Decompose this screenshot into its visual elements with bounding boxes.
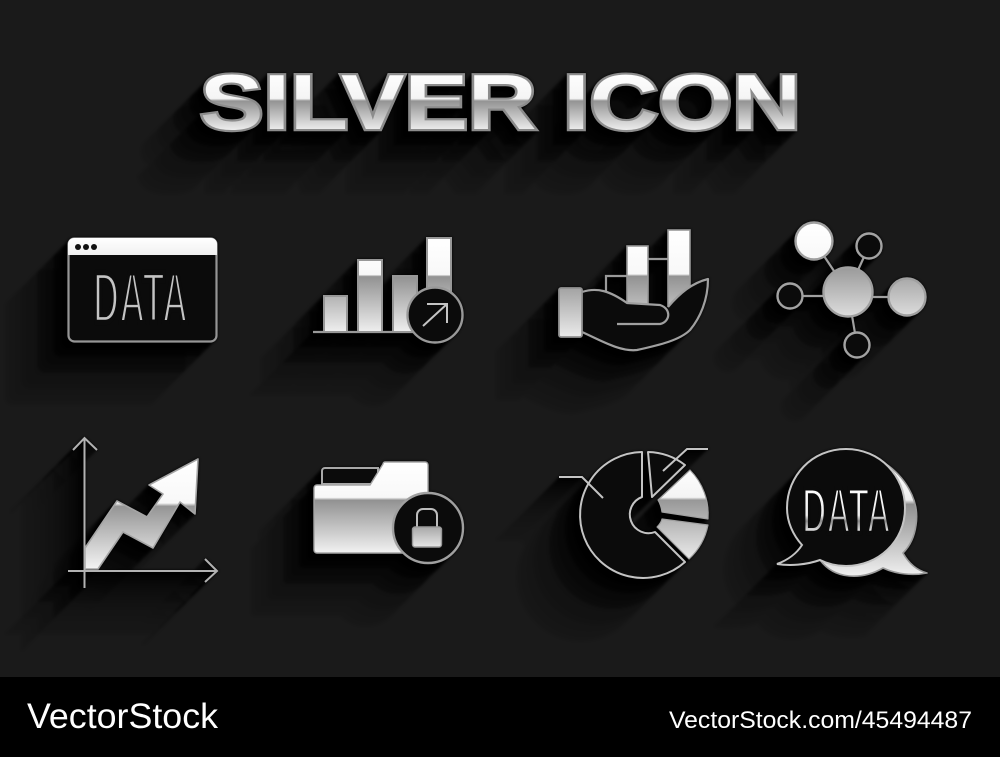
icon: pie chart (559, 449, 708, 578)
window frame (68, 238, 216, 342)
filled nodes (796, 222, 926, 316)
icon: bar chart with arrow badge (313, 238, 462, 342)
icon: browser window with DATA (68, 238, 217, 342)
silver back bubble (820, 460, 927, 576)
leader lines (559, 449, 708, 498)
window title bar (68, 238, 217, 255)
bubble label: DATA (802, 474, 891, 547)
ring nodes (778, 234, 882, 358)
bars (324, 238, 451, 332)
icon: hand holding bars (559, 230, 708, 350)
bars (627, 230, 690, 308)
baseline (313, 331, 420, 333)
filled slices (657, 470, 708, 559)
icon: locked folder (314, 462, 463, 563)
top slice (648, 452, 685, 497)
front bubble (777, 449, 905, 566)
footer image id: VectorStock.com/45494487 (669, 707, 972, 734)
rising arrow (85, 459, 198, 569)
small step outline (606, 259, 668, 292)
hand palm fill (582, 279, 708, 350)
footer band (0, 677, 1000, 757)
arrow badge (408, 288, 462, 342)
icon: network nodes (778, 222, 926, 358)
icon: speech bubble with DATA (777, 449, 927, 576)
hand outline (582, 279, 708, 350)
window label: DATA (93, 259, 188, 339)
window dots (75, 244, 97, 250)
connectors (790, 241, 907, 345)
axes (68, 438, 217, 588)
lock badge (393, 493, 463, 563)
padlock (412, 509, 442, 547)
arrow (423, 304, 447, 326)
footer logo text: VectorStock (27, 697, 219, 736)
pie outline slice (580, 452, 685, 578)
folder body (314, 462, 428, 553)
icon: rising arrow chart (68, 438, 217, 588)
folder back tab (322, 468, 378, 484)
cuff (559, 288, 582, 337)
title: SILVER ICON (200, 58, 801, 146)
